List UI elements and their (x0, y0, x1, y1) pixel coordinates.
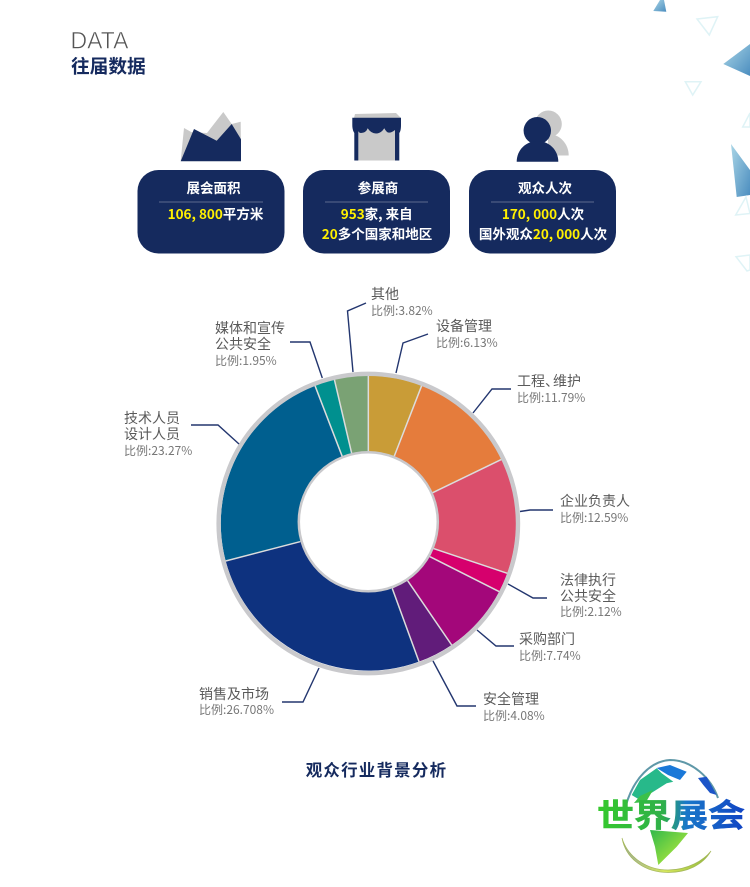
heading (70, 27, 146, 79)
chart title: 观众行业背景分析 (306, 757, 447, 781)
label: 媒体和宣传 公共安全: 媒体和宣传 (215, 318, 285, 338)
label: 其他 (348, 284, 433, 372)
card: exhibitors (303, 170, 450, 254)
label: 采购部门 (477, 629, 581, 664)
label: 采购部门: 比例:7.74% (519, 647, 581, 664)
label: 工程、维护: 工程、维护 (517, 371, 581, 391)
label: 法律执行 公共安全: 法律执行 (560, 570, 616, 590)
card: visitors: 观众人次 (518, 177, 572, 197)
label: 安全管理: 比例:4.08% (483, 707, 545, 724)
label: 媒体和宣传 公共安全: 比例:1.95% (215, 352, 277, 369)
label: 技术人员 设计人员: 技术人员 (124, 408, 180, 428)
card: visitors (469, 170, 616, 254)
card: visitors: 国外观众20, 000人次 (479, 223, 608, 243)
icon: people (517, 110, 569, 162)
label: 其他: 其他 (371, 284, 399, 304)
label: 安全管理: 安全管理 (483, 689, 539, 709)
label: 设备管理 (396, 316, 498, 373)
card: exhibition area (138, 170, 284, 254)
logo: world expo: 世界展会 (597, 790, 745, 836)
label: 法律执行 公共安全: 比例:2.12% (560, 603, 622, 620)
donut chart (219, 374, 518, 673)
label: 销售及市场: 比例:26.708% (199, 701, 274, 718)
label: 销售及市场 (199, 668, 319, 718)
label: 法律执行 公共安全: 公共安全 (560, 586, 616, 606)
panel: exhibition area (138, 112, 284, 254)
label: 设备管理: 比例:6.13% (436, 334, 498, 351)
panel: visitors (469, 110, 616, 254)
label: 技术人员 设计人员: 比例:23.27% (124, 442, 192, 459)
card: exhibitors: 20多个国家和地区 (322, 223, 432, 243)
card: exhibitors: 参展商 (358, 177, 398, 197)
card: exhibitors: 953家, 来自 (341, 203, 413, 223)
decorative triangles (653, 0, 750, 271)
label: 技术人员 设计人员: 设计人员 (124, 424, 180, 444)
card: visitors: 170, 000人次 (502, 203, 585, 223)
label: 工程、维护: 比例:11.79% (517, 389, 585, 406)
label: 法律执行 公共安全 (508, 570, 622, 620)
panel: exhibitors (303, 113, 450, 254)
label: 采购部门: 采购部门 (519, 629, 575, 649)
label: 技术人员 设计人员 (124, 408, 239, 459)
card: exhibition area: 106, 800平方米 (168, 203, 264, 223)
label: 其他: 比例:3.82% (371, 302, 433, 319)
label: 媒体和宣传 公共安全: 公共安全 (215, 334, 271, 354)
label: 媒体和宣传 公共安全 (215, 318, 322, 378)
heading: 往届数据 (71, 52, 146, 79)
heading: DATA (70, 27, 129, 54)
label: 销售及市场: 销售及市场 (199, 684, 269, 704)
label: 企业负责人: 比例:12.59% (560, 509, 628, 526)
label: 设备管理: 设备管理 (436, 316, 492, 336)
card: exhibition area: 展会面积 (186, 177, 241, 197)
label: 工程、维护 (473, 371, 585, 413)
label: 企业负责人 (520, 491, 630, 526)
logo: world expo (597, 760, 745, 872)
icon: storefront (352, 113, 401, 160)
label: 安全管理 (433, 661, 545, 724)
icon: mountains (181, 112, 241, 161)
label: 企业负责人: 企业负责人 (560, 491, 630, 511)
